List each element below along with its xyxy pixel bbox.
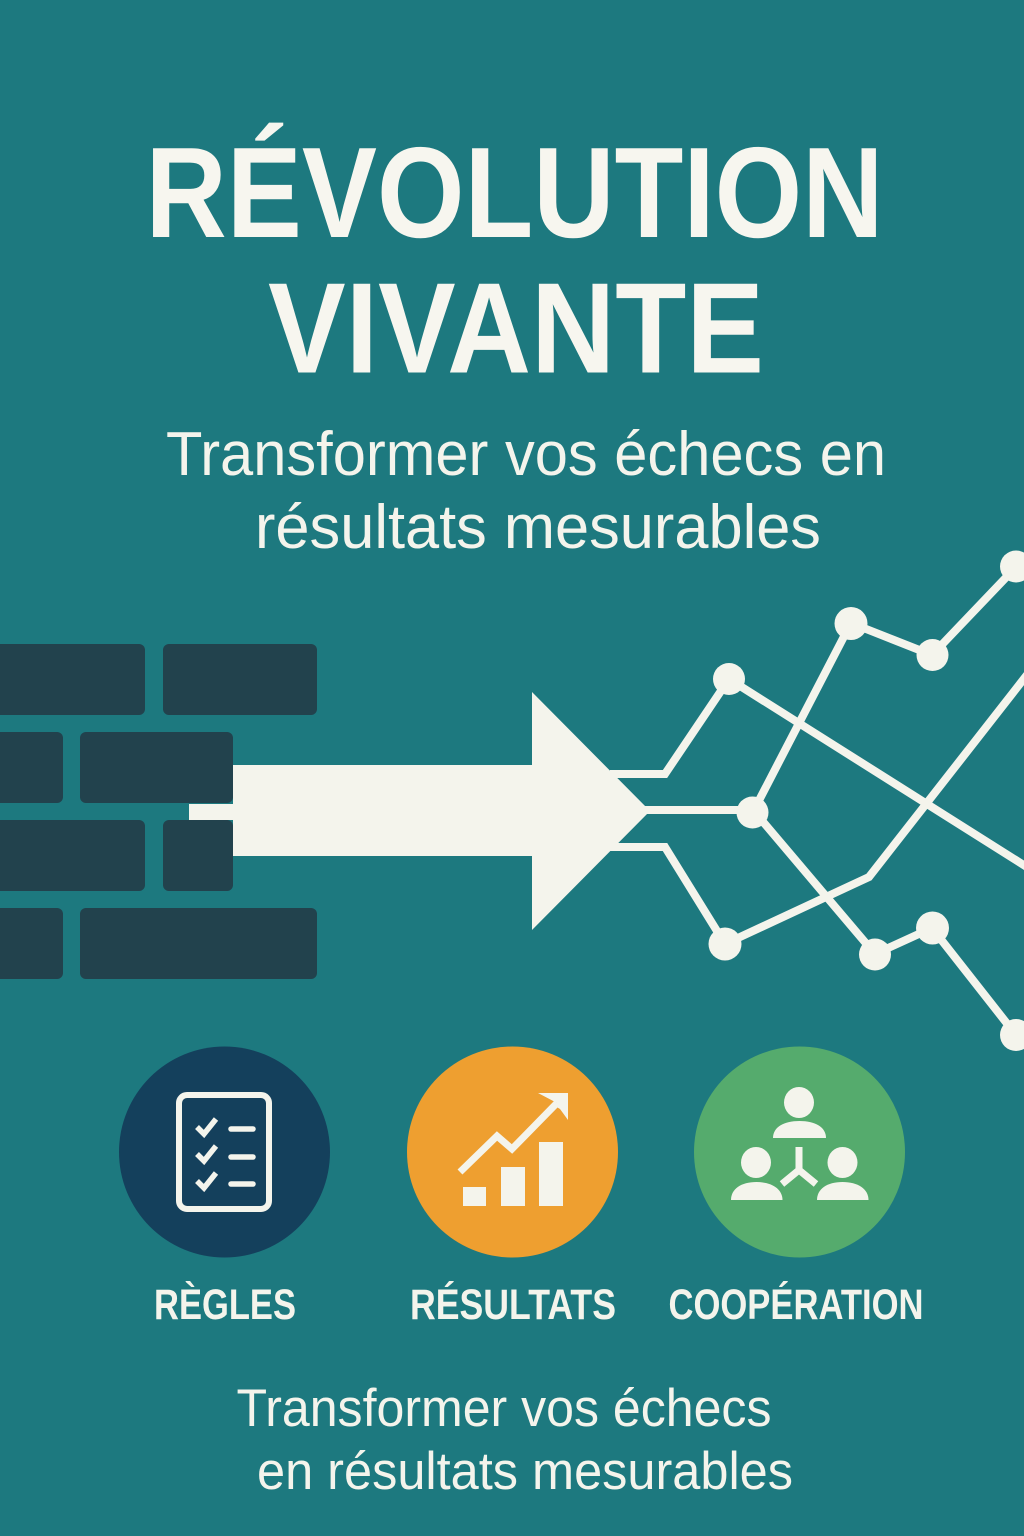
icon labels: RÉSULTATS (410, 1281, 616, 1329)
closing tagline: en résultats mesurables (257, 1442, 793, 1501)
network lines (610, 567, 1024, 1035)
icon labels (154, 1281, 924, 1329)
arrow breaking the wall (189, 692, 650, 930)
title: RÉVOLUTION (146, 121, 884, 265)
subtitle (166, 420, 886, 562)
icon labels: RÈGLES (154, 1281, 296, 1329)
icon: cooperation people (694, 1046, 905, 1258)
brick wall (0, 644, 317, 979)
title: VIVANTE (268, 256, 764, 400)
title (146, 121, 884, 400)
subtitle: résultats mesurables (255, 493, 821, 562)
closing tagline: Transformer vos échecs (236, 1379, 772, 1438)
icon: rules checklist (119, 1046, 330, 1258)
icon: results growth chart (407, 1046, 618, 1258)
network nodes (708, 550, 1024, 1051)
icon labels: COOPÉRATION (668, 1281, 924, 1329)
closing tagline (236, 1379, 793, 1501)
subtitle: Transformer vos échecs en (166, 420, 886, 489)
